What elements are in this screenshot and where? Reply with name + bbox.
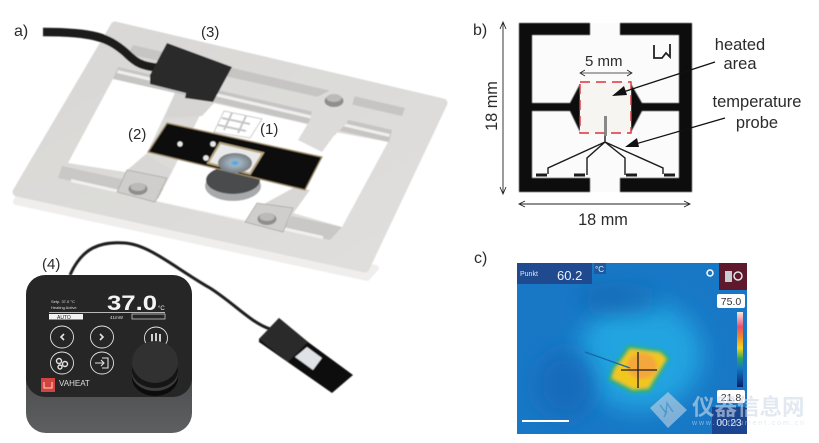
dim 5 mm	[580, 53, 632, 76]
label (4): (4)	[42, 256, 60, 273]
dim 18 mm horizontal	[519, 201, 690, 229]
display readout	[49, 292, 165, 321]
chip with connector	[259, 318, 353, 393]
logo: VAHEAT	[59, 379, 90, 388]
panel a: microscope stage adapter	[16, 26, 443, 278]
sliding clamps	[165, 93, 215, 118]
controller cable	[70, 243, 270, 329]
cable a	[43, 32, 160, 68]
panel c: thermal image	[517, 263, 747, 434]
buttons	[50, 326, 168, 374]
dim 5 mm: 5 mm	[585, 53, 622, 70]
watermark: www.instrument.com.cn	[691, 420, 804, 427]
arrow temperature probe	[625, 118, 725, 147]
dim 18 mm vertical	[483, 22, 506, 194]
readout: °C	[595, 265, 604, 274]
black PCB	[148, 123, 322, 190]
dim 18 mm vertical: 18 mm	[483, 81, 501, 131]
controller body	[26, 330, 192, 433]
arrow heated area	[612, 62, 715, 96]
display readout: 41mW	[110, 315, 124, 320]
label (1): (1)	[260, 121, 278, 138]
colour scale	[717, 294, 745, 404]
scale bar	[522, 420, 569, 422]
label heated area: area	[723, 55, 757, 73]
plate	[17, 26, 443, 268]
temperature probe traces	[548, 115, 663, 175]
watermark: 仪器信息网	[692, 394, 805, 420]
label (3): (3)	[201, 24, 219, 41]
lower slot	[58, 166, 342, 240]
controller	[26, 243, 270, 433]
chip on stage	[214, 111, 262, 138]
display readout: 37.0	[107, 292, 157, 315]
display readout: Heating Active	[51, 305, 77, 310]
connector	[150, 43, 232, 102]
arrow on thermal image	[585, 352, 630, 368]
PCB window	[208, 143, 263, 174]
display readout: °C	[158, 306, 165, 312]
logo	[41, 378, 90, 392]
label heated area: heated	[715, 36, 765, 54]
display readout: Setp. 37.0 °C	[51, 299, 75, 304]
colour scale: 75.0	[721, 296, 741, 308]
label a): a)	[14, 23, 28, 40]
status icons	[707, 263, 747, 290]
time: 00:23	[716, 418, 742, 429]
label temperature probe: probe	[736, 114, 778, 132]
display readout: AUTO	[57, 315, 71, 321]
readout: Punkt	[520, 271, 538, 278]
clamp screws	[117, 170, 167, 202]
crosshair	[621, 352, 657, 388]
white window left	[68, 79, 175, 172]
label c): c)	[474, 250, 487, 267]
watermark	[650, 392, 805, 428]
dim 18 mm horizontal: 18 mm	[578, 211, 628, 229]
logo	[654, 44, 670, 58]
probe tip	[604, 116, 607, 133]
chip background	[519, 23, 692, 192]
readout	[517, 263, 606, 284]
label b): b)	[473, 22, 487, 39]
readout: 60.2	[557, 268, 582, 283]
label temperature probe: temperature	[713, 93, 801, 111]
label (2): (2)	[128, 126, 146, 143]
controller top face	[26, 275, 192, 397]
chip black frame	[519, 23, 692, 192]
hot spot	[608, 345, 670, 393]
panel b: sensor chip	[473, 22, 801, 229]
white window right and centre	[157, 103, 388, 227]
time	[712, 407, 747, 434]
heated area dashed box	[580, 82, 631, 133]
knob	[132, 341, 178, 396]
upper slot	[128, 45, 405, 116]
thermal glow	[578, 300, 702, 410]
objective lens	[205, 171, 261, 201]
colour scale: 21.8	[721, 392, 741, 404]
plate edge	[16, 194, 376, 278]
